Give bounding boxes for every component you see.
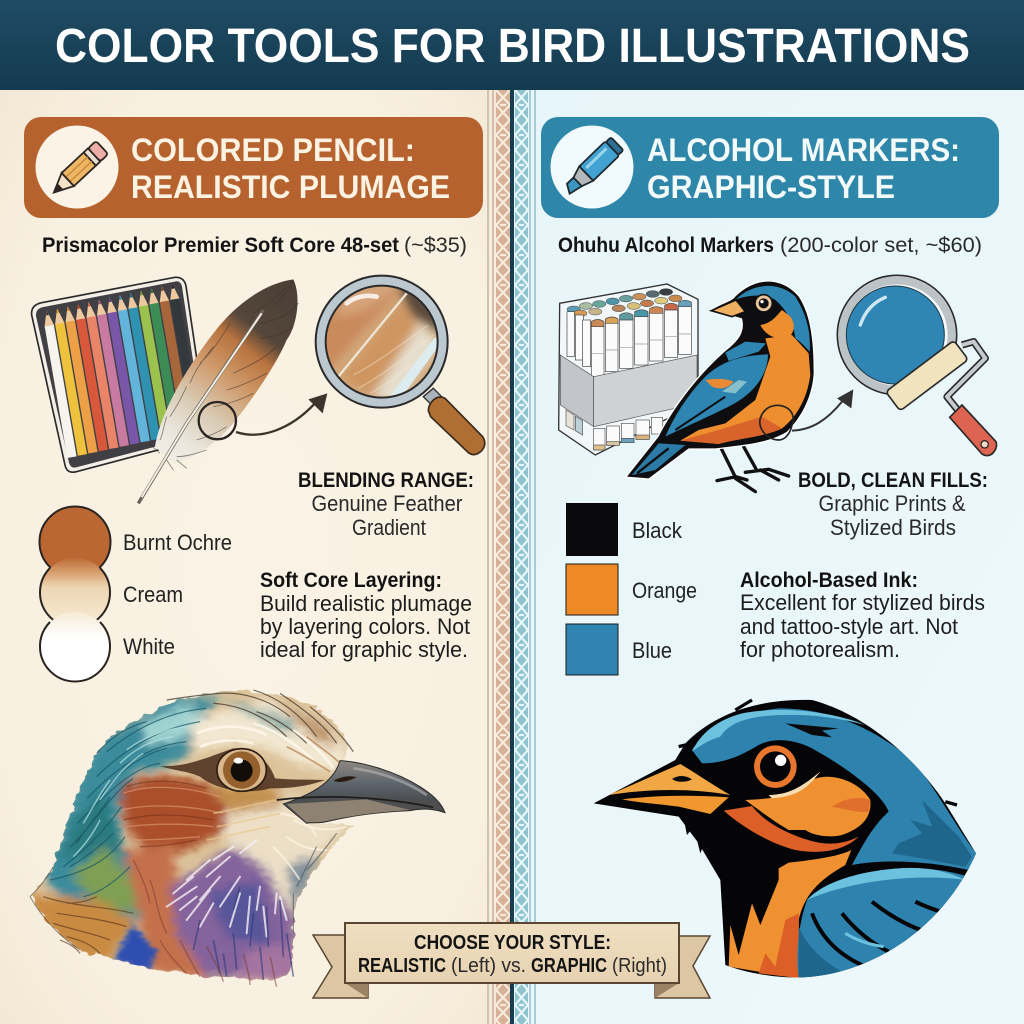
swatch: orange: [566, 564, 697, 615]
markers front row: [567, 305, 691, 377]
choose your style ribbon: [313, 923, 710, 998]
wing: [797, 868, 979, 980]
fur strands: cheek: [122, 787, 223, 840]
ribbon tail right: [655, 936, 710, 998]
callout: bold clean fills: Graphic Prints &: [818, 491, 966, 516]
swatch: blue: Blue: [632, 638, 672, 663]
eye: [160, 748, 325, 791]
tail: [632, 443, 685, 475]
ribbon text: (Left) vs.: [451, 955, 526, 977]
cheek: [760, 310, 794, 339]
illustration row: markers, bird and roller: [559, 275, 996, 492]
panel header: alcohol markers: [541, 117, 999, 218]
ribbon text: REALISTIC: [358, 955, 446, 977]
bird silhouette: [627, 282, 814, 478]
eye: [754, 745, 797, 788]
text block: soft core layering: ideal for graphic style.: [260, 637, 468, 662]
beak: [711, 300, 745, 317]
realistic bird head drawing: [20, 680, 445, 997]
heading: alcohol markers: ALCOHOL MARKERS:: [647, 132, 960, 168]
swatch: white: [40, 612, 175, 682]
wing: [665, 354, 768, 437]
ribbon text: (Right): [612, 955, 667, 977]
product line: pencils: Prismacolor Premier Soft Core 48-set: [42, 234, 399, 257]
black silhouette: [594, 700, 976, 977]
paint roller magnifier: [837, 275, 996, 456]
callout: bold clean fills: [798, 469, 988, 540]
product line: markers: [558, 234, 982, 257]
magnifier: [316, 276, 485, 455]
color swatches: marker inks: [566, 503, 697, 675]
ribbon tail left: [313, 935, 368, 998]
zoom circle on feather: [199, 402, 236, 439]
swatch: black: Black: [632, 518, 683, 543]
beak: [609, 764, 730, 814]
orange breast: [729, 850, 851, 978]
fur strands: teal: [50, 708, 207, 897]
text block: soft core layering: [260, 569, 472, 662]
center ornamental divider: [487, 90, 536, 1024]
icon: marker: [550, 126, 634, 208]
feather quill: [138, 310, 263, 503]
heading: realistic plumage: REALISTIC PLUMAGE: [131, 169, 450, 205]
swatch: orange: Orange: [632, 578, 697, 603]
swatch: burnt ochre: [40, 506, 232, 578]
heading: graphic-style: GRAPHIC-STYLE: [647, 169, 895, 205]
red handle: [950, 405, 996, 456]
graphic bird head drawing: [594, 700, 979, 980]
callout: blending range: Gradient: [352, 515, 426, 540]
fur strands: lower neck: [43, 897, 133, 953]
text block: alcohol-based ink: for photorealism.: [740, 637, 900, 662]
title banner: [0, 0, 1024, 90]
text block: alcohol-based ink: [740, 569, 985, 662]
blue crown: [692, 708, 979, 870]
callout: bold clean fills: BOLD, CLEAN FILLS:: [798, 469, 988, 492]
text block: soft core layering: Soft Core Layering:: [260, 569, 442, 592]
orange cheek: [745, 777, 871, 836]
zoom circle on bird: [760, 405, 793, 440]
product line: pencils: (~$35): [404, 234, 467, 257]
pencil tin: [32, 277, 208, 472]
panel background: colored pencil side: [0, 90, 511, 1024]
swatch: cream: Cream: [123, 582, 183, 607]
ribbon text: [358, 932, 667, 977]
panel background: alcohol markers side: [511, 90, 1024, 1024]
fur strands: crown: [167, 690, 353, 752]
roller wire handle: [947, 342, 985, 413]
eye: [755, 295, 772, 312]
ribbon text: CHOOSE YOUR STYLE:: [414, 932, 611, 954]
title: COLOR TOOLS FOR BIRD ILLUSTRATIONS: [55, 20, 970, 73]
callout: bold clean fills: Stylized Birds: [830, 515, 956, 540]
crown: [736, 286, 810, 352]
illustration row: pencils, feather and magnifier: [32, 276, 485, 503]
text block: soft core layering: Build realistic plumage: [260, 591, 472, 616]
swatch: blue: [566, 624, 672, 675]
arrow to magnifier: [236, 393, 327, 435]
heading: colored pencil: COLORED PENCIL:: [131, 132, 415, 168]
fur strands: throat: [167, 840, 287, 937]
marker bottoms: [566, 410, 663, 450]
colored pencils: [42, 283, 202, 458]
icon: pencil: [36, 126, 118, 208]
text block: alcohol-based ink: Excellent for stylized birds: [740, 590, 985, 615]
feather: [138, 279, 298, 503]
swatch: black: [566, 503, 683, 556]
marker set box: [559, 284, 698, 455]
arrow to roller: [792, 389, 853, 431]
plumage: [32, 689, 354, 980]
text block: alcohol-based ink: and tattoo-style art. Not: [740, 614, 958, 639]
ribbon text: GRAPHIC: [531, 955, 607, 977]
color swatches: pencil blend: [40, 506, 232, 682]
swatch: cream: [40, 558, 183, 628]
small bird: [627, 282, 814, 492]
grey label sleeve: [560, 355, 594, 427]
text block: soft core layering: by layering colors. Not: [260, 614, 470, 639]
swatch: white: White: [123, 634, 175, 659]
callout: blending range: BLENDING RANGE:: [298, 469, 474, 492]
marker caps back rows: [567, 289, 682, 317]
upper back: [725, 342, 766, 361]
product line: markers: Ohuhu Alcohol Markers: [558, 234, 774, 257]
product line: markers: (200-color set, ~$60): [780, 234, 982, 257]
roller sleeve: [886, 340, 968, 411]
bird breast: [680, 335, 810, 444]
callout: blending range: Genuine Feather: [312, 491, 462, 516]
callout: blending range: [298, 469, 474, 540]
bird legs: [717, 447, 789, 492]
panel header: colored pencil: [24, 117, 483, 218]
text block: alcohol-based ink: Alcohol-Based Ink:: [740, 569, 918, 592]
swatch: burnt ochre: Burnt Ochre: [123, 530, 232, 555]
beak: [277, 761, 445, 823]
